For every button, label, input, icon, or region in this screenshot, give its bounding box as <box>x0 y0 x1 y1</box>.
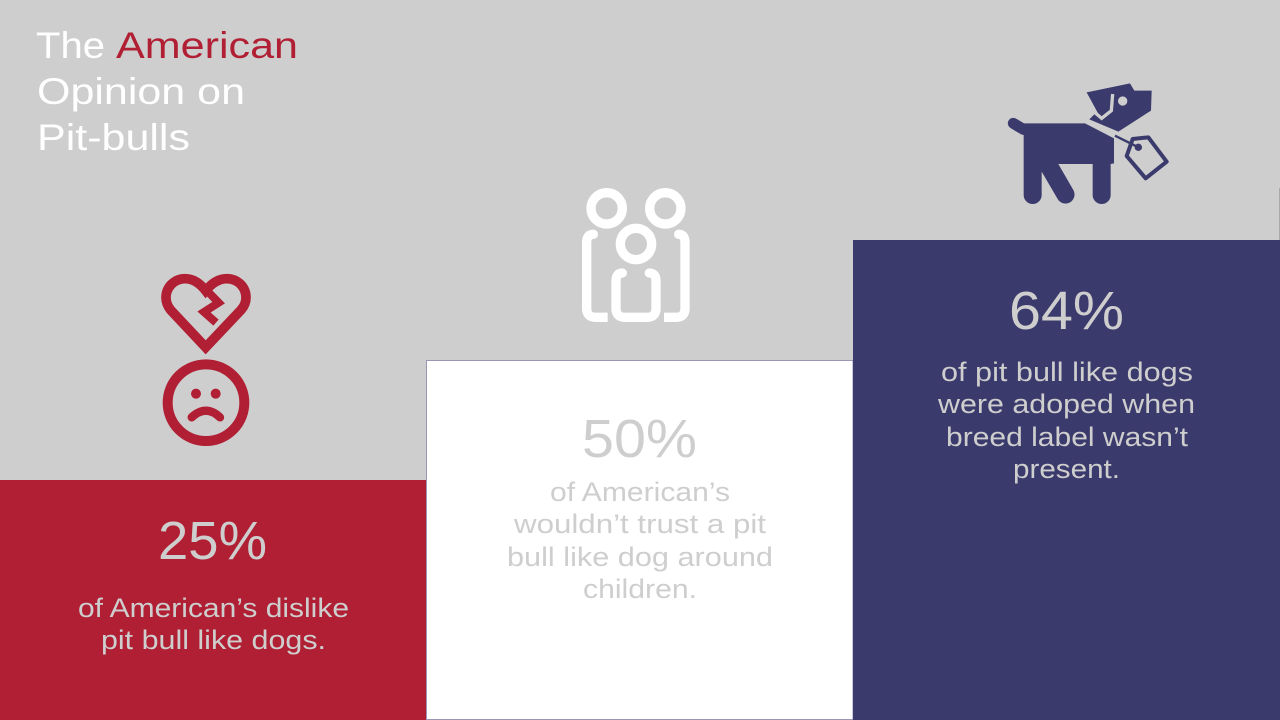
text: adoption description: breed label wasn’t <box>946 422 1189 452</box>
text: distrust description <box>507 477 773 604</box>
stat: 50%: 50% <box>582 409 697 469</box>
icon: family <box>587 193 685 317</box>
panel: 25 percent dislike <box>0 480 427 720</box>
text: distrust description: wouldn’t trust a pit <box>513 509 767 539</box>
icon: dog with tag <box>1013 83 1167 204</box>
title: The <box>36 25 105 66</box>
stat: 64%: 64% <box>1009 281 1124 341</box>
title: Opinion on <box>37 71 245 112</box>
text: adoption description: present. <box>1013 454 1120 484</box>
title: American <box>116 25 298 66</box>
icon: broken heart <box>166 279 246 347</box>
stat: 25%: 25% <box>158 511 267 571</box>
text: dislike description: of American’s dislike <box>78 593 349 623</box>
text: distrust description: children. <box>583 574 697 604</box>
icon: sad face <box>168 364 244 441</box>
text: adoption description: of pit bull like dogs <box>941 357 1193 387</box>
text: adoption description: were adoped when <box>937 389 1195 419</box>
text: distrust description: bull like dog around <box>507 542 773 572</box>
panel: 64 percent adopted <box>853 240 1280 720</box>
title <box>36 25 298 158</box>
text: adoption description <box>937 357 1195 484</box>
title: Pit-bulls <box>37 117 190 158</box>
panel: 50 percent distrust <box>426 360 853 720</box>
text: dislike description: pit bull like dogs. <box>101 625 326 655</box>
text: dislike description <box>78 593 349 655</box>
text: distrust description: of American’s <box>550 477 730 507</box>
